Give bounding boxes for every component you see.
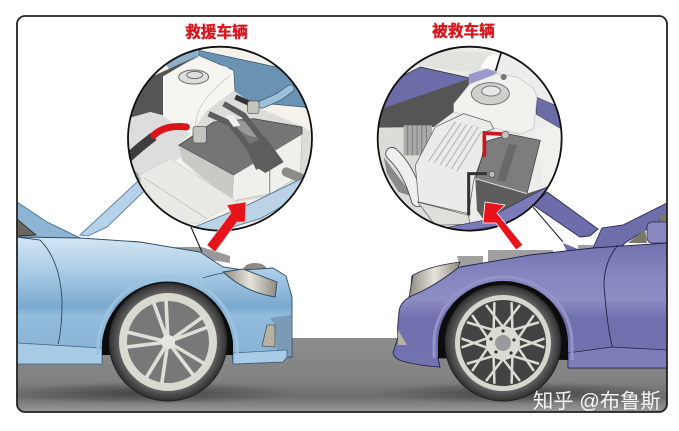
reservoir cap <box>471 83 509 105</box>
door line <box>604 244 618 347</box>
side skirt <box>17 343 102 364</box>
arrow: rescue vehicle <box>207 202 246 252</box>
red cable <box>484 133 505 157</box>
reservoir cap <box>179 70 209 84</box>
windshield pillar <box>593 203 667 248</box>
red jumper cable <box>154 126 186 135</box>
hood prop <box>544 187 564 215</box>
fender line <box>203 273 223 278</box>
second terminal <box>248 101 259 114</box>
purple panel top <box>469 69 498 85</box>
strut base <box>563 243 578 250</box>
battery stripe <box>497 144 517 182</box>
watermark: 知乎 @布鲁斯 <box>533 390 661 413</box>
battery front <box>475 179 547 224</box>
strut <box>534 207 560 234</box>
black strut <box>496 53 501 71</box>
wheel: hub <box>486 326 520 360</box>
headlight <box>223 269 277 297</box>
reservoir seam <box>195 75 230 126</box>
grey under hose <box>384 157 414 197</box>
door line <box>17 237 62 344</box>
purple panel right <box>536 97 564 130</box>
battery strap line <box>268 167 272 194</box>
battery vent oval <box>232 117 262 140</box>
bay floor right <box>534 125 564 190</box>
hood edge band <box>440 187 555 234</box>
black cable <box>469 174 487 215</box>
battery top edge <box>475 179 527 194</box>
wheel: mesh spokes <box>462 302 544 384</box>
scene <box>0 170 671 412</box>
battery right side <box>232 134 302 201</box>
fender ring <box>434 277 572 360</box>
side skirt <box>568 347 667 368</box>
air filter box <box>415 114 494 214</box>
wheel arch <box>438 281 568 360</box>
engine bay parts <box>457 245 593 267</box>
air duct bellows <box>404 125 432 155</box>
raised hood prop <box>79 181 144 236</box>
coolant reservoir <box>454 74 537 134</box>
circle outline <box>378 47 562 231</box>
air filter ribs <box>429 122 481 171</box>
wheel: lug nuts <box>489 329 516 355</box>
black terminal <box>489 171 495 177</box>
white gap <box>480 53 501 71</box>
upper blue edge <box>164 50 199 70</box>
top left panel <box>410 50 492 72</box>
wheel: rim <box>119 293 217 391</box>
wheel: rim <box>455 295 551 391</box>
battery clamp <box>209 104 279 169</box>
hood strut <box>191 227 202 252</box>
title: assisted vehicle: 被救车辆 <box>432 22 495 40</box>
engine bay parts <box>133 241 230 263</box>
wheel: hub centre <box>495 335 511 351</box>
red terminal <box>193 126 206 143</box>
fog lamp <box>398 330 407 345</box>
dark bay wall <box>377 79 470 128</box>
blue car: rescue vehicle <box>17 170 292 401</box>
rear window corner <box>660 212 666 222</box>
wheel: hub <box>161 335 175 349</box>
dark hose end <box>286 172 302 179</box>
left bay floor <box>127 112 190 175</box>
wheel: openings <box>127 301 209 383</box>
battery front side <box>179 145 234 201</box>
right bay floor <box>182 90 314 204</box>
purple car: assisted vehicle <box>393 192 671 401</box>
wheel: twin spokes <box>127 300 208 382</box>
wheel: tire <box>109 283 227 401</box>
side window <box>17 219 36 236</box>
side mirror <box>646 222 666 244</box>
arrow: assisted vehicle <box>483 202 523 250</box>
wheel: tire <box>445 285 561 401</box>
ground <box>17 338 667 412</box>
headlight housing behind <box>243 263 266 270</box>
dark hose stub <box>235 97 249 103</box>
red terminal <box>502 131 509 139</box>
wheel arch <box>102 281 233 355</box>
shadow under purple car <box>396 384 643 402</box>
bumper intake <box>270 315 291 357</box>
detail circle: assisted vehicle battery <box>377 47 564 234</box>
lower left floor <box>377 127 435 225</box>
panel crease <box>144 178 207 219</box>
wheel: openings <box>460 300 546 386</box>
coolant reservoir <box>163 59 234 127</box>
purple bonnet band <box>380 67 470 109</box>
headlight <box>409 262 460 297</box>
battery top <box>475 134 540 194</box>
circle outline <box>128 47 312 231</box>
lower left floor shade <box>127 164 140 194</box>
reservoir bolt <box>501 74 507 80</box>
title: rescue vehicle: 救援车辆 <box>185 22 248 42</box>
detail circle: rescue vehicle battery <box>127 47 314 234</box>
battery top <box>179 119 302 175</box>
side window <box>628 229 647 243</box>
hood edge band <box>190 174 314 234</box>
fog lamp <box>262 325 275 347</box>
raised hood prop <box>533 192 598 237</box>
bumper lip <box>233 350 287 364</box>
shadow under blue car <box>26 384 274 402</box>
body <box>17 237 292 364</box>
fender ring <box>98 277 237 355</box>
air filter base <box>418 202 470 225</box>
hood strut <box>533 207 563 242</box>
upper blue hose <box>262 89 290 104</box>
dark bay wall <box>127 55 199 119</box>
windshield pillar <box>17 202 80 240</box>
black cable <box>127 136 154 159</box>
body <box>393 243 667 368</box>
engine bay blue panel <box>199 50 314 110</box>
blue hood prop <box>127 184 147 214</box>
white hose <box>392 154 418 200</box>
clamp highlight <box>225 115 240 127</box>
lower left panel <box>139 159 238 224</box>
